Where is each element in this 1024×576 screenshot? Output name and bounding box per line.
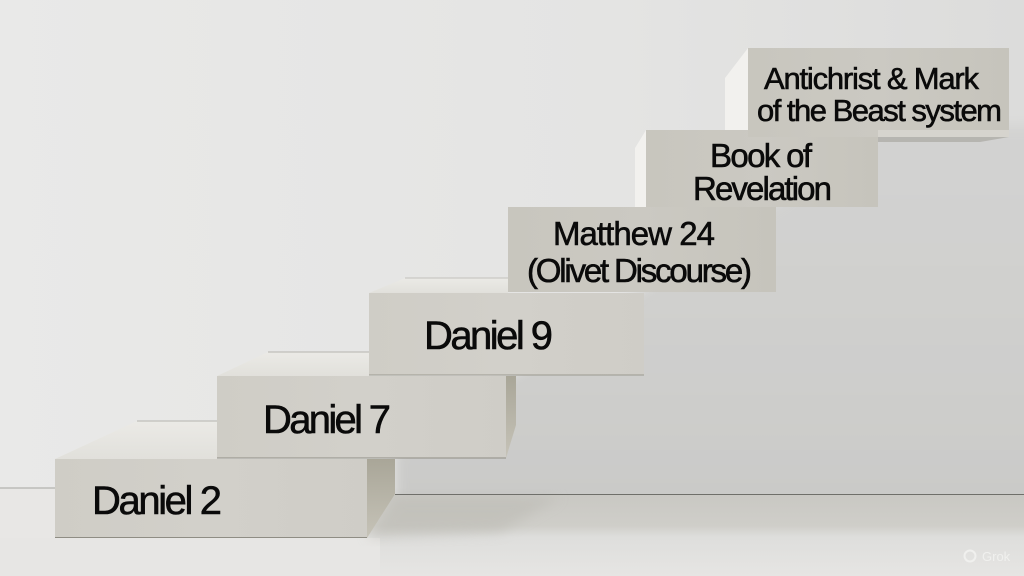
label: Daniel 7: Daniel 7 [263,398,391,442]
step 1: Daniel 2 [55,420,395,538]
step 3: Daniel 9 [369,278,644,376]
label: Daniel 2: Daniel 2 [92,479,222,523]
label: Book of: Book of [710,137,813,174]
label: Olivet Discourse: (Olivet Discourse) [527,252,752,289]
shaded wall behind the stairs [395,125,1024,560]
label: Antichrist and Mark: Antichrist & Mark [764,61,980,96]
label: Daniel 9: Daniel 9 [424,314,553,358]
step 2: Daniel 7 [217,352,516,458]
label: of the Beast system: of the Beast system [757,93,1002,128]
step 5: Book of Revelation [635,130,878,207]
label: Matthew 24: Matthew 24 [553,215,715,252]
step 6: Antichrist and Mark of the Beast system [725,48,1009,142]
floor [0,488,1024,576]
step 4: Matthew 24 (Olivet Discourse) [508,207,776,292]
watermark: Grok: Grok [982,549,1011,564]
watermark: Grok [964,549,1011,564]
label: Revelation: Revelation [693,170,832,207]
